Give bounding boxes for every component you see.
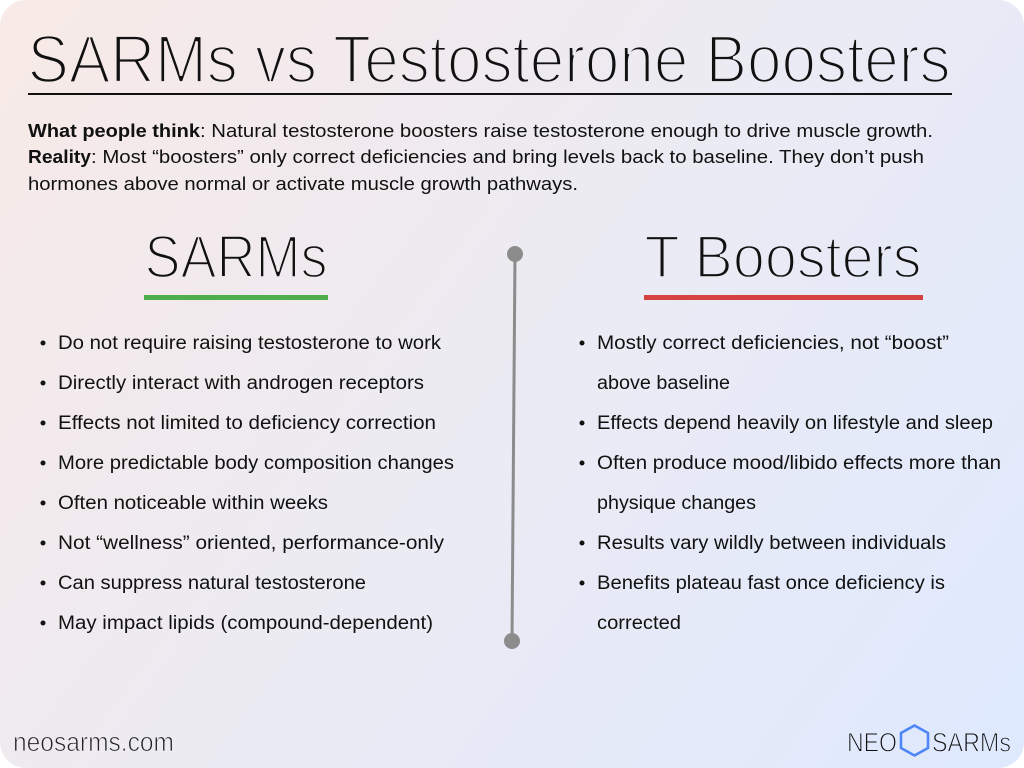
list: T Boosters points: above baseline: [597, 373, 730, 394]
list: SARMs points: Effects not limited to deficiency correction: [58, 413, 436, 434]
intro text block: Reality: [28, 146, 92, 167]
list: T Boosters points: [580, 333, 1001, 634]
intro text block: : Natural testosterone boosters raise testosterone enough to drive muscle growth.: [200, 120, 933, 141]
intro text block: : Most “boosters” only correct deficiencies and bring levels back to baseline. They don’t push: [91, 146, 924, 167]
list: SARMs points: Do not require raising testosterone to work: [58, 333, 442, 354]
logo: NEO SARMs: NEO: [847, 727, 897, 757]
heading: SARMs: SARMs: [144, 222, 328, 290]
list: T Boosters points: Benefits plateau fast once deficiency is: [597, 573, 945, 594]
center divider: [504, 246, 523, 649]
list: SARMs points: [40, 333, 454, 634]
list: SARMs points: Often noticeable within weeks: [58, 493, 328, 514]
icon: hexagon: [901, 726, 928, 756]
title: SARMs vs Testosterone Boosters: [28, 22, 950, 98]
list: T Boosters points: Mostly correct deficiencies, not “boost”: [597, 333, 949, 354]
list: SARMs points: Directly interact with androgen receptors: [58, 373, 424, 394]
list: SARMs points: More predictable body composition changes: [58, 453, 454, 474]
logo: NEO SARMs: [847, 726, 1011, 757]
list: T Boosters points: corrected: [597, 613, 681, 634]
logo: NEO SARMs: SARMs: [932, 727, 1011, 757]
list: SARMs points: Not “wellness” oriented, performance-only: [58, 533, 445, 554]
list: T Boosters points: Results vary wildly between individuals: [597, 533, 946, 554]
list: T Boosters points: Often produce mood/libido effects more than: [597, 453, 1001, 474]
list: T Boosters points: Effects depend heavily on lifestyle and sleep: [597, 413, 993, 434]
intro text block: [28, 120, 933, 194]
heading: T Boosters: T Boosters: [644, 222, 922, 290]
intro text block: hormones above normal or activate muscle growth pathways.: [28, 173, 578, 194]
list: SARMs points: May impact lipids (compound-dependent): [58, 613, 433, 634]
list: SARMs points: Can suppress natural testosterone: [58, 573, 366, 594]
website url: neosarms.com: [13, 729, 174, 757]
intro text block: What people think: [28, 120, 201, 141]
list: T Boosters points: physique changes: [597, 493, 756, 514]
